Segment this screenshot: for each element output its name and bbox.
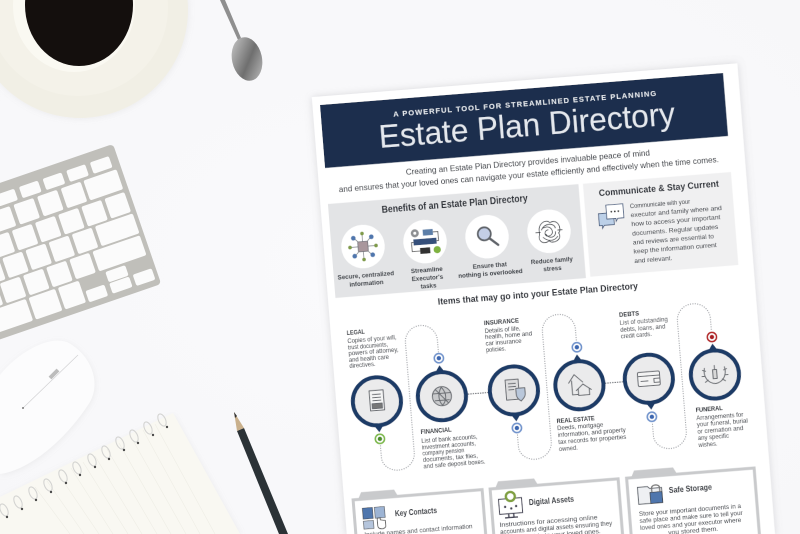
communicate text: Communicate with your bbox=[630, 199, 690, 210]
icon: insurance policy bbox=[505, 379, 526, 402]
benefit: reduce stress bbox=[526, 208, 572, 255]
key contacts heading: Key Contacts bbox=[395, 506, 438, 518]
legal text: Copies of your will, bbox=[347, 335, 397, 345]
label: secure: information bbox=[349, 279, 384, 289]
safe storage text bbox=[639, 504, 744, 534]
real estate text: REAL ESTATE bbox=[556, 415, 596, 425]
icon: monitor and gear bbox=[498, 491, 523, 518]
insurance text: policies. bbox=[486, 346, 507, 354]
benefit: streamline tasks bbox=[402, 218, 448, 265]
step: financial bbox=[415, 351, 486, 470]
dot: blue bbox=[647, 412, 657, 422]
icon: will document bbox=[369, 390, 385, 411]
dot: green bbox=[375, 434, 385, 444]
icon: house bbox=[568, 373, 592, 396]
debts text: List of outstanding bbox=[620, 317, 668, 327]
timeline connectors bbox=[371, 303, 721, 471]
debts text: DEBTS bbox=[619, 310, 640, 319]
intro text: Creating an Estate Plan Directory provides invaluable peace of mind bbox=[405, 148, 650, 177]
safe storage heading: Safe Storage bbox=[668, 482, 713, 495]
communicate text: and reviews are essential to bbox=[633, 234, 715, 247]
dot: blue bbox=[512, 423, 522, 433]
funeral text: any specific bbox=[698, 434, 729, 442]
label: reduce stress: Reduce family bbox=[531, 256, 574, 266]
financial text: List of bank accounts, bbox=[421, 435, 478, 445]
folder: safe storage bbox=[626, 461, 760, 534]
digital assets text bbox=[499, 514, 613, 534]
spiral notebook bbox=[0, 413, 240, 534]
dot: blue bbox=[572, 342, 582, 352]
legal text: powers of attorney, bbox=[348, 348, 399, 358]
communicate text bbox=[630, 197, 726, 265]
debts text bbox=[619, 308, 669, 340]
insurance text: health, home and bbox=[485, 332, 532, 341]
label: overlooked: nothing is overlooked bbox=[458, 268, 523, 280]
label: streamline: Executor's bbox=[412, 274, 444, 283]
communicate text: executor and family where and bbox=[631, 206, 722, 219]
legal text: directives. bbox=[349, 362, 376, 370]
icon: credit card bbox=[637, 371, 660, 387]
label: streamline bbox=[411, 266, 445, 291]
icon: wreath and candle bbox=[701, 365, 729, 385]
legal text: and health care bbox=[349, 355, 390, 364]
real estate text bbox=[556, 413, 627, 453]
funeral text: your funeral, burial bbox=[697, 419, 748, 429]
folder: key contacts bbox=[353, 483, 486, 534]
step: debts bbox=[619, 308, 676, 423]
icon: chat bubbles bbox=[598, 204, 625, 229]
step: legal bbox=[347, 326, 406, 445]
real estate text: Deeds, mortgage bbox=[557, 423, 604, 432]
financial text: company pension bbox=[422, 448, 465, 458]
label: overlooked bbox=[457, 260, 523, 280]
label: reduce stress bbox=[531, 256, 574, 274]
real estate text: tax records for properties bbox=[558, 435, 627, 446]
legal text bbox=[347, 326, 400, 370]
directory page bbox=[312, 63, 775, 534]
digital assets text: Instructions for accessing online bbox=[499, 515, 599, 529]
financial text: investment accounts, bbox=[422, 441, 476, 451]
safe storage text: loved ones and your executor where bbox=[640, 518, 742, 532]
debts text: credit cards. bbox=[621, 332, 652, 340]
label: streamline: Streamline bbox=[411, 266, 443, 275]
legal text: trust documents, bbox=[348, 342, 389, 351]
step: real estate bbox=[551, 339, 627, 453]
step: funeral bbox=[688, 330, 750, 449]
communicate text: and relevant. bbox=[634, 256, 673, 265]
icon: folder with lock bbox=[637, 484, 663, 504]
funeral text: Arrangements for bbox=[696, 412, 744, 422]
safe storage text: Store your important documents in a bbox=[639, 504, 742, 518]
label: overlooked: Ensure that bbox=[473, 261, 507, 271]
funeral text: wishes. bbox=[697, 441, 718, 449]
communicate text: documents. Regular updates bbox=[632, 225, 719, 238]
digital assets heading: Digital Assets bbox=[529, 494, 575, 507]
dot: red bbox=[707, 332, 717, 342]
funeral text: or cremation and bbox=[697, 426, 744, 435]
panel: benefits bbox=[328, 184, 586, 298]
icon: contacts bbox=[362, 506, 386, 530]
benefits heading: Benefits of an Estate Plan Directory bbox=[381, 193, 529, 216]
title: Estate Plan Directory bbox=[377, 96, 676, 155]
folder: digital assets bbox=[490, 472, 623, 534]
communicate text: how to access your important bbox=[631, 215, 721, 228]
icon: financial globe bbox=[432, 386, 452, 406]
benefit: nothing overlooked bbox=[464, 213, 510, 260]
mouse bbox=[0, 341, 95, 474]
step: insurance bbox=[484, 316, 541, 435]
header eyebrow: A POWERFUL TOOL FOR STREAMLINED ESTATE PLANNING bbox=[393, 89, 657, 119]
legal text: LEGAL bbox=[347, 329, 365, 337]
page sheet bbox=[312, 63, 775, 534]
spoon bbox=[220, 0, 266, 84]
financial text: FINANCIAL bbox=[420, 427, 452, 436]
insurance text: Details of life, bbox=[484, 326, 521, 335]
debts text: debts, loans, and bbox=[620, 324, 666, 334]
funeral text: FUNERAL bbox=[695, 405, 723, 414]
communicate text: keep the information current bbox=[633, 243, 717, 256]
financial text bbox=[420, 424, 486, 470]
real estate text: owned. bbox=[559, 446, 579, 453]
label: streamline: tasks bbox=[420, 282, 437, 291]
financial text: and safe deposit boxes. bbox=[423, 459, 486, 470]
dot: blue bbox=[434, 353, 444, 363]
financial text: documents, tax files, bbox=[423, 454, 479, 464]
funeral text bbox=[694, 403, 750, 449]
label: reduce stress: stress bbox=[543, 265, 562, 273]
intro text: and ensures that your loved ones can navigate your estate efficiently and effectively when the time comes. bbox=[338, 154, 719, 194]
header banner bbox=[320, 73, 728, 168]
items heading: Items that may go into your Estate Plan Directory bbox=[438, 281, 639, 308]
insurance text bbox=[484, 316, 533, 354]
label: secure: Secure, centralized bbox=[337, 270, 395, 282]
real estate text: information, and property bbox=[558, 428, 626, 439]
label: secure bbox=[337, 270, 395, 290]
coffee cup and saucer bbox=[0, 0, 188, 118]
insurance text: car insurance bbox=[485, 339, 522, 348]
benefit: secure information bbox=[340, 223, 386, 270]
communicate heading: Communicate & Stay Current bbox=[598, 179, 720, 199]
keyboard bbox=[0, 144, 161, 369]
panel: communicate bbox=[583, 172, 738, 277]
insurance text: INSURANCE bbox=[484, 317, 520, 327]
pencil bbox=[234, 412, 288, 534]
safe storage text: safe place and make sure to tell your bbox=[639, 511, 743, 525]
